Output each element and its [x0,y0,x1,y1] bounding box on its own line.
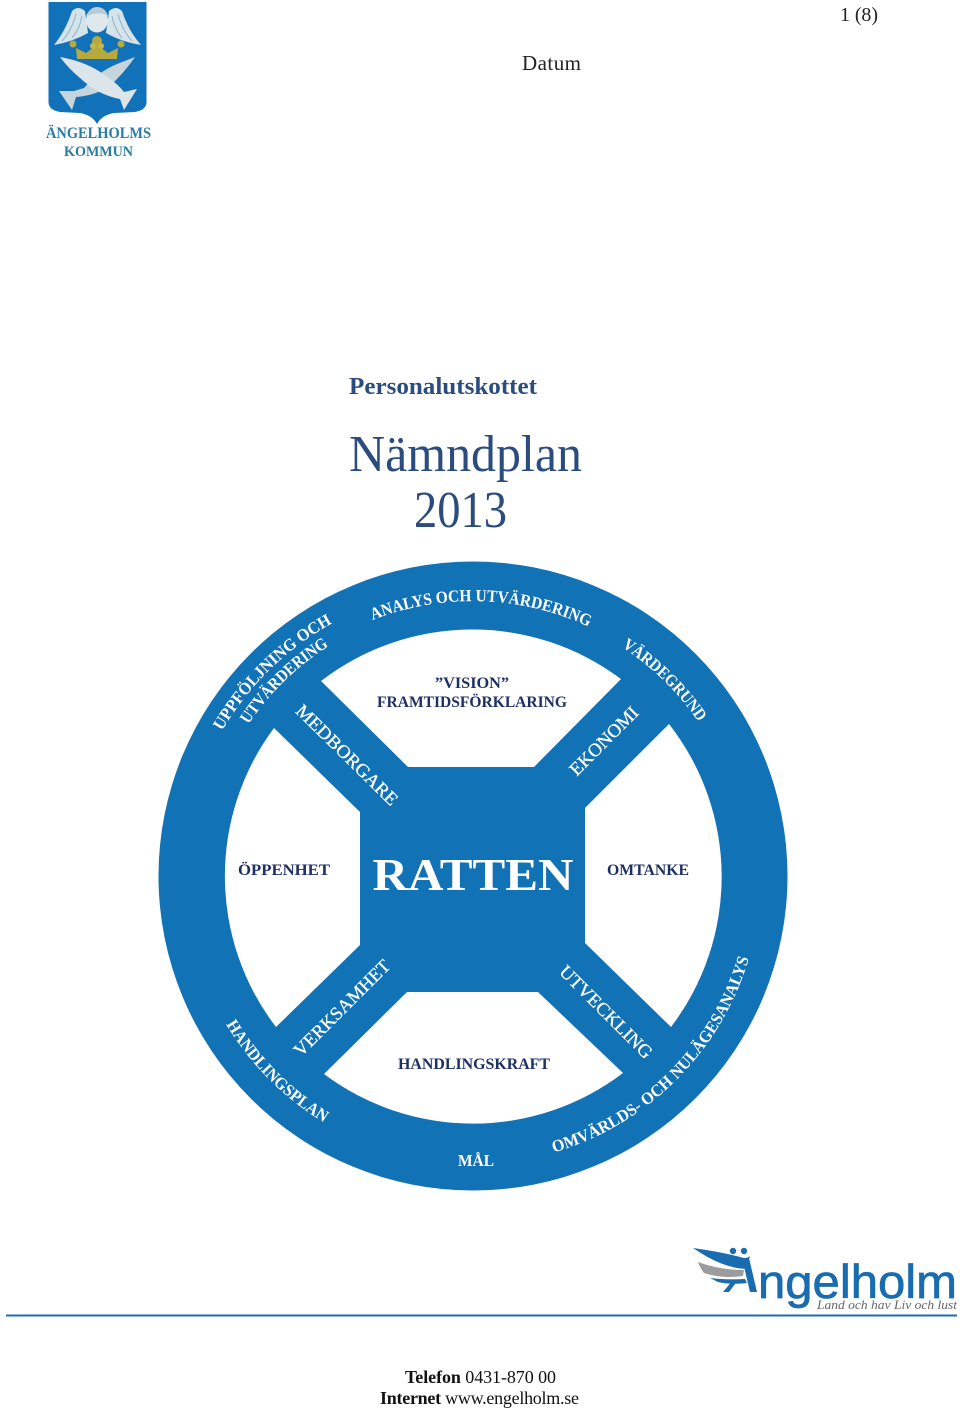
rim label: uppföljning och utvärdering: UTVÄRDERING [239,638,328,722]
left wing [54,8,88,45]
right wing [106,8,141,45]
wheel rim [158,562,788,1190]
date label: Datum [522,51,581,75]
crown [76,45,118,59]
panel: handlingskraft: HANDLINGSKRAFT [398,1056,550,1073]
panel: handlingskraft [324,992,623,1124]
panel: vision: FRAMTIDSFÖRKLARING [377,693,568,711]
fish, head left-facing upper [59,57,135,110]
brand logo: Ängelholm [693,1248,957,1312]
rim label: omvärlds- och nulägesanalys: OMVÄRLDS- OCH NULÄGESANALYS [552,956,748,1152]
panel: vision: ”VISION” [435,675,509,692]
rim label: analys och utvärdering: ANALYS OCH UTVÄRDERING [372,590,592,626]
hub label: RATTEN [372,849,574,900]
logo text: ÄNGELHOLMS [46,125,151,142]
panel: omtanke: OMTANKE [607,862,689,879]
rim label: mål: MÅL [458,1151,494,1170]
spoke label: ekonomi: EKONOMI [566,703,643,780]
chart: steering wheel diagram [158,562,788,1190]
municipal logo: Ängelholms kommun [46,2,151,160]
head [86,8,108,32]
spoke label: verksamhet: VERKSAMHET [290,956,395,1061]
rim label: handlingsplan: HANDLINGSPLAN [226,1018,330,1122]
spoke label: medborgare: MEDBORGARE [291,701,401,810]
panel: omtanke [585,724,722,1027]
icon: swoosh A [693,1248,757,1292]
panel: öppenhet: ÖPPENHET [238,861,330,879]
title [349,426,582,539]
footer contact: internet: Internet www.engelholm.se [380,1388,579,1408]
municipal logo: Ängelholms kommun: KOMMUN [64,144,133,160]
spoke label: utveckling: UTVECKLING [555,962,656,1063]
panel: vision [321,629,621,767]
title: 2013 [414,482,507,539]
title: Nämndplan [349,426,582,483]
wordmark: ngelholm [758,1255,957,1308]
department heading: Personalutskottet [349,374,537,400]
footer contact: telephone: Telefon 0431-870 00 [405,1367,556,1387]
tagline: Land och hav Liv och lust [816,1297,957,1312]
rim label: värdegrund: VÄRDEGRUND [626,638,706,720]
panel: öppenhet [225,728,360,1027]
rim label: uppföljning och utvärdering: UPPFÖLJNING OCH [212,614,332,728]
icon: coat of arms shield [48,2,146,124]
page number: 1 (8) [840,4,878,26]
